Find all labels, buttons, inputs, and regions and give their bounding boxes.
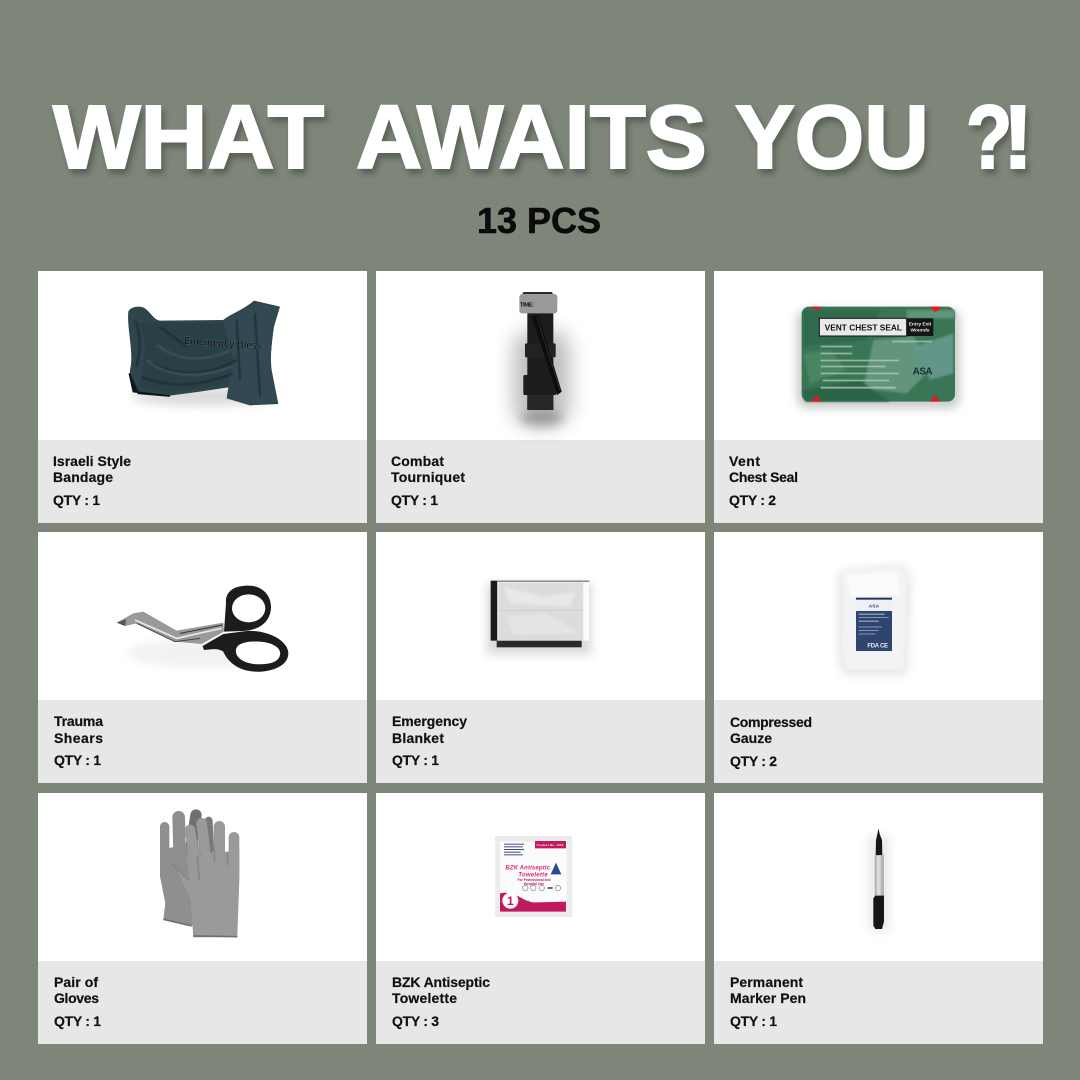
label: Compressed Gauze: Gauze	[730, 730, 772, 746]
icon: vent chest seal package: ASA	[913, 367, 933, 378]
icon: BZK antiseptic towelette packet: Hospital Use	[524, 882, 544, 886]
label: Emergency Blanket: Emergency	[392, 713, 467, 729]
icon: BZK antiseptic towelette packet: Product No. 1060	[537, 843, 564, 847]
icon: BZK antiseptic towelette packet: 1" x 1"	[520, 899, 530, 903]
label: Combat Tourniquet: Tourniquet	[391, 469, 465, 485]
title: !	[1003, 88, 1033, 188]
icon: bandage	[128, 301, 280, 406]
icon: BZK antiseptic towelette packet: BZK Antiseptic	[505, 866, 551, 872]
label: Israeli Style Bandage: Bandage	[53, 469, 113, 485]
label: Combat Tourniquet: Combat	[391, 453, 444, 469]
label: Permanent Marker Pen: Marker Pen	[730, 990, 806, 1006]
label: Pair of Gloves: QTY : 1	[54, 1013, 101, 1029]
label: Trauma Shears	[54, 713, 103, 768]
label: Permanent Marker Pen: QTY : 1	[730, 1013, 777, 1029]
title	[53, 87, 1033, 188]
panel: compressed gauze	[714, 532, 1043, 783]
label: Emergency Blanket	[392, 713, 467, 768]
label: BZK Antiseptic Towelette	[392, 974, 490, 1029]
title: YOU	[735, 88, 929, 188]
label: Israeli Style Bandage	[53, 453, 131, 508]
label: Emergency Blanket: QTY : 1	[392, 752, 439, 768]
panel: combat tourniquet	[376, 271, 705, 523]
label: Trauma Shears: QTY : 1	[54, 752, 101, 768]
icon: vent chest seal package: Entry Exit	[909, 322, 932, 328]
icon: vent chest seal package: Wounds	[911, 328, 930, 334]
label: Combat Tourniquet	[391, 453, 465, 508]
label: Trauma Shears: Trauma	[54, 713, 103, 729]
icon: emergency blanket	[487, 581, 592, 655]
label: Pair of Gloves	[54, 974, 101, 1029]
label: BZK Antiseptic Towelette: BZK Antiseptic	[392, 974, 490, 990]
label: Compressed Gauze: Compressed	[730, 714, 812, 730]
label: Israeli Style Bandage: QTY : 1	[53, 492, 100, 508]
icon: BZK antiseptic towelette packet	[495, 836, 572, 917]
label: BZK Antiseptic Towelette: QTY : 3	[392, 1013, 439, 1029]
label: BZK Antiseptic Towelette: Towelette	[392, 990, 457, 1006]
label: Trauma Shears: Shears	[54, 730, 103, 746]
panel: emergency blanket	[376, 532, 705, 783]
panel: trauma shears	[38, 532, 367, 783]
label: Vent Chest Seal: Chest Seal	[729, 469, 798, 485]
label: Vent Chest Seal	[729, 453, 798, 508]
icon: compressed gauze pack	[838, 565, 911, 675]
icon: compressed gauze pack: ASA	[869, 604, 880, 610]
panel: vent chest seal	[714, 271, 1043, 523]
icon: gloves	[160, 815, 239, 937]
panel: BZK antiseptic towelette	[376, 793, 705, 1044]
icon: vent chest seal package: VENT CHEST SEAL	[825, 323, 902, 333]
label: Israeli Style Bandage: Israeli Style	[53, 453, 131, 469]
panel: permanent marker pen	[714, 793, 1043, 1044]
icon: compressed gauze pack: FDA CE	[867, 643, 888, 649]
subtitle: 13 pcs: 13 PCS	[477, 200, 601, 241]
label: Emergency Blanket: Blanket	[392, 730, 444, 746]
label: Permanent Marker Pen	[730, 974, 806, 1029]
icon: bandage: Emergency Bless	[184, 335, 263, 353]
icon: BZK antiseptic towelette packet: For Professional and	[517, 878, 551, 882]
icon: tourniquet	[513, 292, 570, 427]
panel: pair of gloves	[38, 793, 367, 1044]
icon: trauma shears	[117, 586, 288, 672]
title: ?	[966, 87, 1012, 187]
label: Vent Chest Seal: QTY : 2	[729, 492, 776, 508]
label: Compressed Gauze	[730, 714, 812, 769]
panel: Israeli style bandage	[38, 271, 367, 523]
front glove	[190, 823, 234, 877]
icon: BZK antiseptic towelette packet: 1	[507, 894, 514, 908]
label: Compressed Gauze: QTY : 2	[730, 753, 777, 769]
label: Vent Chest Seal: Vent	[729, 453, 760, 469]
label: Pair of Gloves: Pair of	[54, 974, 98, 990]
icon: vent chest seal package	[797, 307, 960, 408]
label: Permanent Marker Pen: Permanent	[730, 974, 803, 990]
icon: marker pen	[868, 828, 890, 932]
icon: BZK antiseptic towelette packet: Towelette	[518, 872, 548, 878]
title: AWAITS	[356, 88, 707, 188]
icon: tourniquet: TIME:	[520, 303, 534, 309]
label: Combat Tourniquet: QTY : 1	[391, 492, 438, 508]
label: Pair of Gloves: Gloves	[54, 990, 99, 1006]
title: WHAT	[53, 87, 324, 188]
back glove	[165, 817, 180, 873]
